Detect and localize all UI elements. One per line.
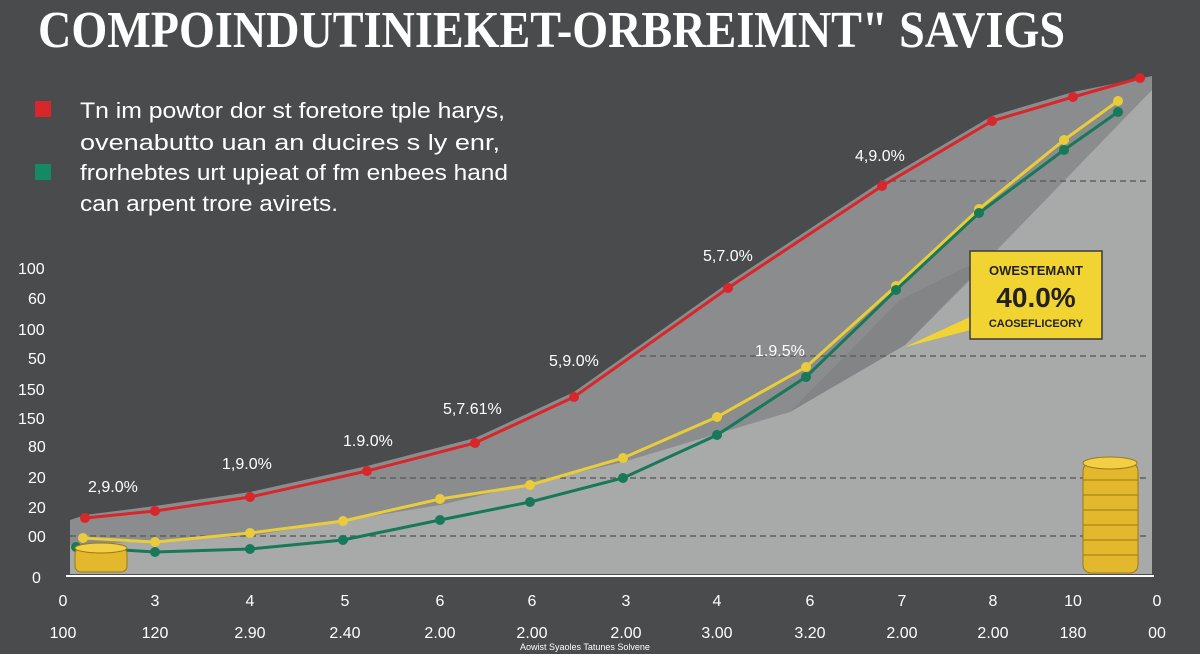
percent labels: 2,9.0% <box>88 479 138 496</box>
callout <box>905 251 1102 347</box>
x axis labels: 6 <box>806 593 815 610</box>
percent labels <box>88 148 905 496</box>
x axis labels: 2.40 <box>329 625 361 642</box>
x axis labels: 7 <box>898 593 907 610</box>
percent labels: 1.9.5% <box>755 343 805 360</box>
red line <box>85 78 1140 518</box>
x axis labels: 4 <box>246 593 255 610</box>
percent labels: 4,9.0% <box>855 148 905 165</box>
x axis labels: 2.90 <box>234 625 266 642</box>
icon: coins left <box>75 543 127 572</box>
legend: Tn im powtor dor st foretore tple harys, <box>80 98 505 123</box>
x axis labels: 2.00 <box>516 625 548 642</box>
x axis labels: 3.20 <box>794 625 826 642</box>
y axis labels <box>18 261 46 587</box>
y axis labels: 100 <box>18 261 45 278</box>
x axis labels: Aowist Syaoles Tatunes Solvene <box>520 642 650 652</box>
y axis labels: 150 <box>18 411 45 428</box>
x axis labels: 3 <box>622 593 631 610</box>
title: COMPOINDUTINIEKET-ORBREIMNT" SAVIGS <box>38 2 1065 59</box>
x axis labels <box>50 593 1166 652</box>
x axis labels: 2.00 <box>886 625 918 642</box>
x axis labels: 5 <box>341 593 350 610</box>
y axis labels: 00 <box>28 529 46 546</box>
x axis labels: 6 <box>436 593 445 610</box>
percent labels: 5,9.0% <box>549 353 599 370</box>
percent labels: 1,9.0% <box>222 456 272 473</box>
callout: 40.0% <box>996 282 1076 313</box>
y axis labels: 20 <box>28 500 46 517</box>
callout: OWESTEMANT <box>989 263 1083 278</box>
y axis labels: 100 <box>18 322 45 339</box>
x axis labels: 3 <box>151 593 160 610</box>
yellow line <box>83 101 1118 542</box>
y axis labels: 20 <box>28 470 46 487</box>
chart <box>66 73 1154 576</box>
callout: CAOSEFLICEORY <box>989 318 1084 330</box>
x axis labels: 0 <box>59 593 68 610</box>
x axis labels: 2.00 <box>977 625 1009 642</box>
y axis labels: 60 <box>28 291 46 308</box>
percent labels: 1.9.0% <box>343 433 393 450</box>
percent labels: 5,7.61% <box>443 401 502 418</box>
legend: frorhebtes urt upjeat of fm enbees hand <box>80 160 508 185</box>
x axis labels: 8 <box>989 593 998 610</box>
y axis labels: 50 <box>28 351 46 368</box>
legend <box>35 98 508 216</box>
y axis labels: 150 <box>18 382 45 399</box>
x axis labels: 00 <box>1148 625 1166 642</box>
x axis labels: 4 <box>713 593 722 610</box>
x axis labels: 2.00 <box>610 625 642 642</box>
y axis labels: 0 <box>32 570 41 587</box>
x axis labels: 120 <box>142 625 168 642</box>
x axis labels: 6 <box>528 593 537 610</box>
x axis labels: 3.00 <box>701 625 733 642</box>
percent labels: 5,7.0% <box>703 248 753 265</box>
y axis labels: 80 <box>28 439 46 456</box>
x axis labels: 100 <box>50 625 76 642</box>
x axis labels: 180 <box>1060 625 1086 642</box>
x axis labels: 0 <box>1153 593 1162 610</box>
green line <box>76 112 1118 552</box>
legend: can arpent trore avirets. <box>80 191 338 216</box>
icon: coins right <box>1083 457 1138 573</box>
legend: ovenabutto uan an ducires s ly enr, <box>80 130 500 155</box>
x axis labels: 10 <box>1064 593 1082 610</box>
x axis labels: 2.00 <box>424 625 456 642</box>
